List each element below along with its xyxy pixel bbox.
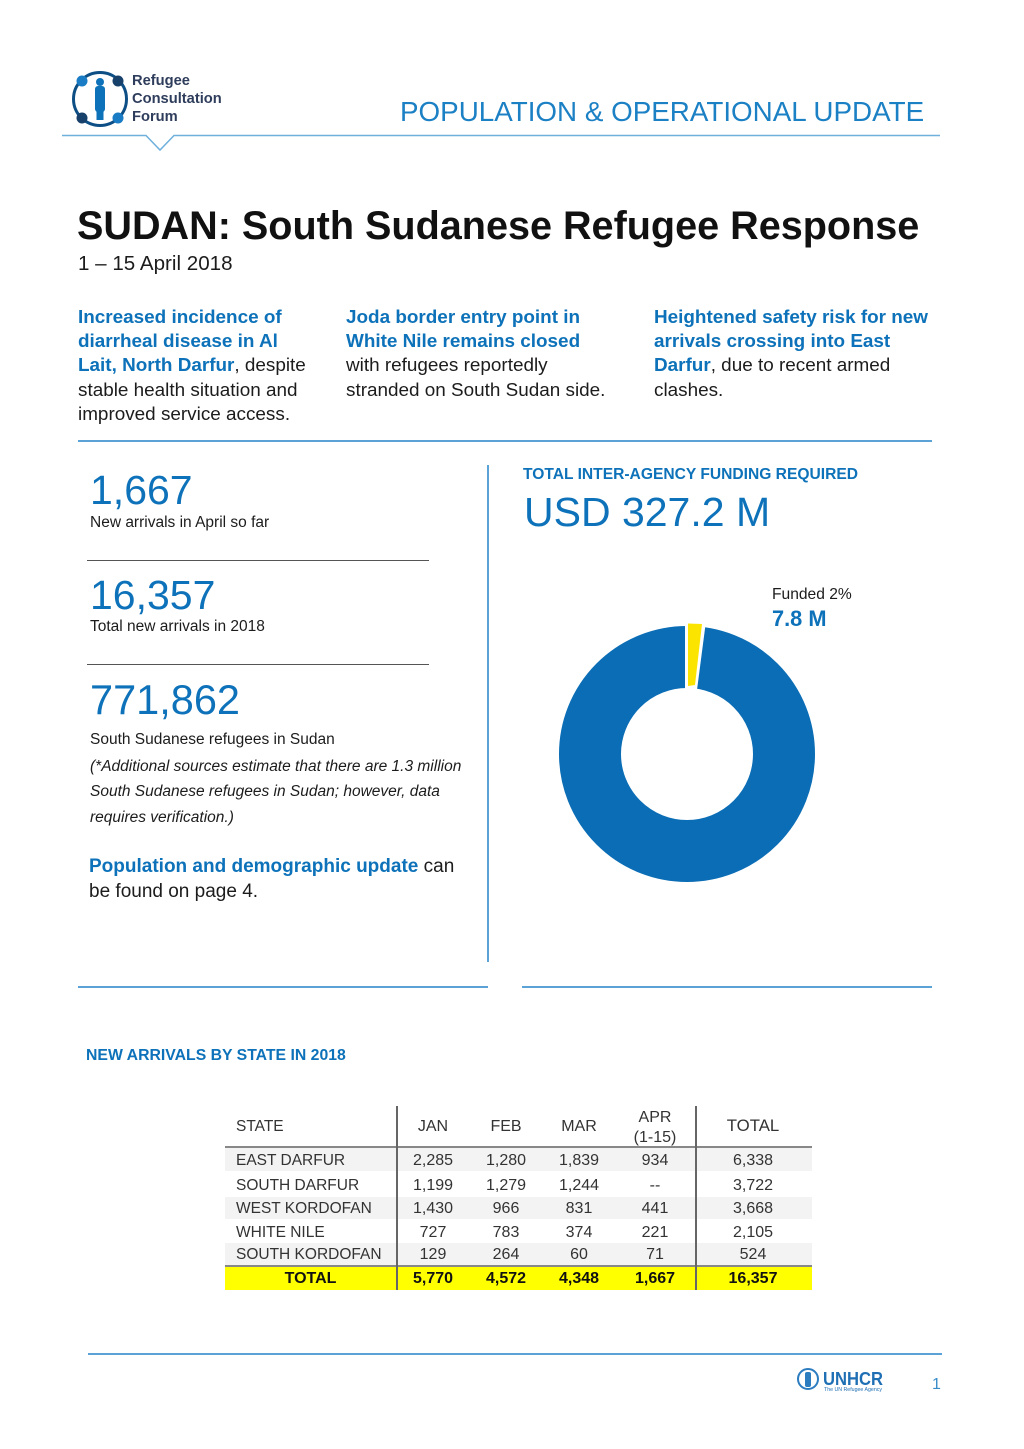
row: East Darfur: EAST DARFUR [236, 1152, 345, 1169]
highlight 3: clashes. [654, 380, 723, 401]
highlight 1: stable health situation and [78, 380, 298, 401]
highlight 3: Darfur, due to recent armed [654, 355, 890, 376]
row: South Darfur: 3,722 [733, 1177, 773, 1194]
verification note: requires verification.) [90, 809, 234, 826]
row: West Kordofan: WEST KORDOFAN [236, 1200, 372, 1217]
table header row: TOTAL [727, 1116, 779, 1135]
highlight 3 [654, 307, 928, 401]
row: White Nile: 2,105 [733, 1224, 773, 1241]
row: White Nile: 221 [642, 1224, 668, 1241]
row: Total: TOTAL [285, 1270, 336, 1287]
row: South Kordofan: 129 [420, 1246, 446, 1263]
main title: SUDAN: South Sudanese Refugee Response [77, 204, 919, 248]
stat: refugees in Sudan: 771,862 [90, 676, 240, 723]
highlight 3: Heightened safety risk for new [654, 307, 928, 328]
row: West Kordofan [236, 1200, 773, 1217]
stat: new arrivals April: New arrivals in April so far [90, 514, 269, 531]
table heading: NEW ARRIVALS BY STATE IN 2018 [86, 1047, 346, 1064]
highlight 2: Joda border entry point in [346, 307, 580, 328]
donut chart [559, 624, 815, 882]
row: Total [284, 1270, 777, 1287]
verification note: (*Additional sources estimate that there are 1.3 million [90, 758, 461, 774]
icon: ring with person [74, 72, 126, 126]
row: South Kordofan: 524 [740, 1246, 766, 1263]
row: East Darfur: 2,285 [413, 1152, 453, 1169]
row: White Nile: 727 [420, 1224, 446, 1241]
row: Total: 16,357 [729, 1270, 777, 1287]
page number: 1 [932, 1376, 941, 1393]
row: White Nile: 374 [566, 1224, 592, 1241]
table header row: APR [639, 1109, 671, 1126]
table header row: JAN [418, 1118, 448, 1135]
table [225, 1106, 812, 1290]
row: South Kordofan: 71 [646, 1246, 664, 1263]
highlight 2: with refugees reportedly [346, 355, 548, 376]
table header row: (1-15) [634, 1129, 676, 1146]
row: East Darfur: 934 [642, 1152, 668, 1169]
stat: new arrivals 2018 [90, 572, 265, 635]
date: 1 – 15 April 2018 [78, 252, 233, 274]
row: West Kordofan: 1,430 [413, 1200, 453, 1217]
row: West Kordofan: 966 [493, 1200, 519, 1217]
row: White Nile: 783 [493, 1224, 519, 1241]
highlight 1: diarrheal disease in Al [78, 331, 278, 352]
row stripes [225, 1147, 812, 1171]
stat: new arrivals April: 1,667 [90, 467, 193, 513]
table header row: FEB [490, 1118, 522, 1135]
row: East Darfur: 1,839 [559, 1152, 599, 1169]
table header row: STATE [236, 1118, 284, 1135]
row: South Kordofan: 60 [570, 1246, 588, 1263]
row: Total: 4,348 [559, 1270, 599, 1287]
row: White Nile [236, 1224, 773, 1241]
highlight 2: White Nile remains closed [346, 331, 580, 352]
row: South Kordofan: 264 [493, 1246, 519, 1263]
highlight 1: improved service access. [78, 404, 290, 425]
highlight 1 [78, 307, 306, 425]
header title: POPULATION & OPERATIONAL UPDATE [400, 96, 924, 127]
demographic note: be found on page 4. [89, 880, 258, 902]
row: West Kordofan: 3,668 [733, 1200, 773, 1217]
UNHCR logo: The UN Refugee Agency [824, 1387, 883, 1393]
stat: refugees in Sudan [90, 676, 461, 826]
funded label: 7.8 M [772, 606, 827, 631]
stat: new arrivals 2018: 16,357 [90, 572, 215, 618]
logo text: Forum [132, 109, 178, 125]
funding label: TOTAL INTER-AGENCY FUNDING REQUIRED [523, 466, 858, 483]
demographic note: Population and demographic update can [89, 856, 454, 877]
header logo [72, 71, 222, 127]
row: South Darfur [236, 1177, 773, 1194]
highlight 2: stranded on South Sudan side. [346, 380, 605, 401]
table header row: MAR [561, 1118, 597, 1135]
row: West Kordofan: 831 [566, 1200, 592, 1217]
logo text: Consultation [132, 91, 222, 107]
funded label: Funded 2% [772, 586, 852, 603]
row: East Darfur: 6,338 [733, 1152, 773, 1169]
highlight 1: Lait, North Darfur, despite [78, 355, 306, 376]
stat: new arrivals April [90, 467, 269, 531]
row: South Darfur: 1,279 [486, 1177, 526, 1194]
row: East Darfur [236, 1152, 773, 1169]
logo text: Refugee [132, 73, 190, 89]
UNHCR logo [797, 1368, 883, 1393]
total row highlight [225, 1267, 812, 1290]
row: South Kordofan [236, 1246, 766, 1263]
row: South Darfur: SOUTH DARFUR [236, 1177, 359, 1194]
row: Total: 5,770 [413, 1270, 453, 1287]
verification note: South Sudanese refugees in Sudan; however, data [90, 783, 440, 800]
row: South Darfur: -- [650, 1177, 660, 1194]
stat: new arrivals 2018: Total new arrivals in 2018 [90, 618, 265, 635]
verification note [90, 758, 461, 826]
highlight 2 [346, 307, 605, 401]
highlight 1: Increased incidence of [78, 307, 282, 328]
row: White Nile: WHITE NILE [236, 1224, 325, 1241]
row: West Kordofan: 441 [642, 1200, 668, 1217]
row: Total: 4,572 [486, 1270, 526, 1287]
row: South Darfur: 1,244 [559, 1177, 599, 1194]
row: Total: 1,667 [635, 1270, 675, 1287]
header rule with notch [62, 134, 940, 151]
row: East Darfur: 1,280 [486, 1152, 526, 1169]
stat: refugees in Sudan: South Sudanese refugees in Sudan [90, 731, 335, 748]
table header row [236, 1109, 779, 1146]
row: South Kordofan: SOUTH KORDOFAN [236, 1246, 382, 1263]
highlight 3: arrivals crossing into East [654, 331, 890, 352]
demographic note [89, 856, 454, 902]
row: South Darfur: 1,199 [413, 1177, 453, 1194]
funding amount: USD 327.2 M [524, 489, 770, 535]
funded label [772, 586, 852, 631]
